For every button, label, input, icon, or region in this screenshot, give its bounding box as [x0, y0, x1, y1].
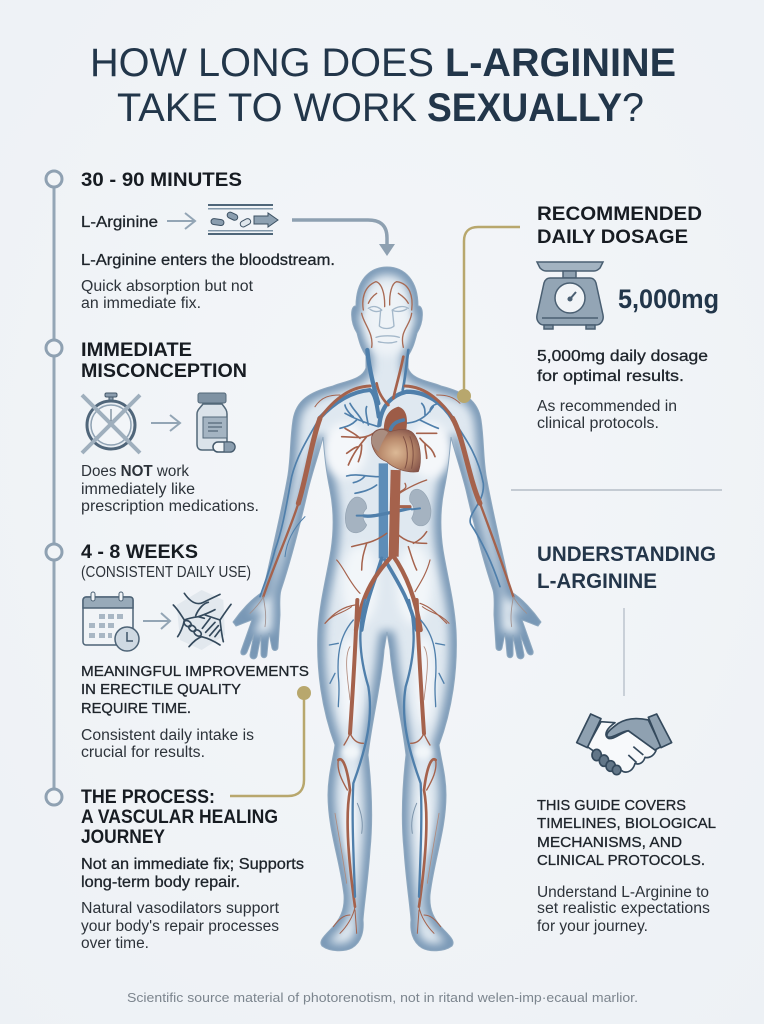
panel: 30 - 90 minutes — [81, 169, 335, 312]
heading: recommended daily dosage — [537, 203, 702, 248]
gold connector: dosage to shoulder — [457, 227, 520, 403]
arteries — [263, 357, 513, 630]
icon: crossed-out stopwatch — [82, 393, 140, 453]
upper body vessels — [250, 282, 527, 630]
text: natural vasodilators: Natural vasodilators support — [81, 900, 280, 917]
arrow: to bloodstream — [167, 213, 195, 229]
arrow: stopwatch to medication — [151, 415, 180, 431]
text: daily dosage: 5,000mg daily dosage — [537, 348, 708, 365]
text: guide covers: CLINICAL PROTOCOLS. — [537, 852, 705, 869]
timeline rail — [46, 171, 62, 805]
heading: the process — [81, 786, 278, 848]
heading: immediate misconception: IMMEDIATE — [81, 339, 192, 361]
arrow: calendar to improvement — [143, 613, 170, 629]
heading: understanding l-arginine: UNDERSTANDING — [537, 543, 716, 566]
heading: the process: JOURNEY — [81, 826, 165, 848]
text: clinical protocols: clinical protocols. — [537, 415, 659, 432]
text: not an immediate fix: Not an immediate fix; Supports — [81, 856, 304, 873]
text: guide covers: TIMELINES, BIOLOGICAL — [537, 815, 716, 832]
text: does not work: immediately like — [81, 481, 195, 498]
icon: calendar with clock — [83, 592, 139, 651]
heart — [371, 429, 420, 472]
panel: understanding l-arginine — [537, 543, 716, 935]
footer note: Scientific source material of photorenotism, not in ritand welen-imp·ecaual marlior. — [127, 990, 638, 1005]
text: realistic expectations: set realistic expectations — [537, 900, 710, 917]
text: consistent intake — [81, 727, 254, 761]
text: consistent intake: Consistent daily intake is — [81, 727, 254, 744]
head vessels — [362, 282, 412, 347]
text: enters bloodstream: L-Arginine enters the bloodstream. — [81, 252, 335, 269]
text: meaningful improvements: MEANINGFUL IMPROVEMENTS — [81, 663, 309, 680]
body silhouette — [233, 267, 541, 951]
text: quick absorption — [81, 278, 254, 312]
panel: recommended daily dosage — [537, 203, 719, 432]
right leg vessels — [404, 600, 449, 933]
text: guide covers: THIS GUIDE COVERS — [537, 797, 686, 814]
icon: bloodstream vessel — [208, 204, 278, 235]
title: ? — [622, 86, 644, 130]
panel: the process — [81, 786, 304, 952]
text: clinical protocols — [537, 398, 677, 432]
icon: handshake — [577, 714, 672, 775]
text: does not work: prescription medications. — [81, 498, 259, 515]
heading: understanding l-arginine — [537, 543, 716, 593]
heading: recommended daily dosage: DAILY DOSAGE — [537, 226, 688, 248]
icon: weighing scale — [537, 262, 603, 329]
text: daily dosage: for optimal results. — [537, 368, 684, 385]
text: does not work: Does NOT work — [81, 463, 189, 480]
left leg vessels — [325, 600, 370, 933]
arrow: bloodstream to body — [292, 220, 395, 256]
text: realistic expectations: Understand L-Arginine to — [537, 884, 709, 901]
heading: understanding l-arginine: L-ARGININE — [537, 570, 657, 593]
panel: immediate misconception — [81, 339, 259, 515]
text: not an immediate fix: long-term body repair. — [81, 874, 240, 891]
label: L-Arginine: L-Arginine — [81, 214, 158, 231]
text: does not work — [81, 463, 259, 515]
text: natural vasodilators: your body's repair processes — [81, 918, 279, 935]
icon: clasped hands — [173, 590, 231, 650]
text: consistent intake: crucial for results. — [81, 744, 205, 761]
title: HOW LONG DOES — [90, 41, 434, 85]
heading: the process: A VASCULAR HEALING — [81, 806, 278, 828]
title: L-ARGININE — [445, 41, 676, 85]
text: daily dosage — [537, 348, 708, 385]
panel: 4 - 8 weeks — [81, 541, 309, 761]
human body with circulatory system — [233, 267, 541, 951]
text: meaningful improvements: REQUIRE TIME. — [81, 700, 191, 717]
text: realistic expectations — [537, 884, 710, 935]
title — [90, 41, 676, 130]
kidneys — [345, 489, 431, 533]
aortic arch — [384, 407, 407, 437]
icon: pill bottle — [197, 393, 235, 452]
title: TAKE TO WORK — [117, 86, 417, 130]
gold connector: process to leg — [230, 686, 311, 796]
text: meaningful improvements — [81, 663, 309, 717]
heart vein overlay — [389, 420, 403, 437]
text: realistic expectations: for your journey. — [537, 918, 648, 935]
text: natural vasodilators — [81, 900, 280, 952]
dosage value: 5,000mg — [618, 284, 719, 314]
text: natural vasodilators: over time. — [81, 935, 149, 952]
face features — [368, 307, 408, 343]
text: guide covers: MECHANISMS, AND — [537, 834, 682, 851]
heading: the process: THE PROCESS: — [81, 786, 215, 808]
title: SEXUALLY — [427, 86, 622, 130]
text: guide covers — [537, 797, 716, 869]
text: not an immediate fix — [81, 856, 304, 891]
heading: immediate misconception — [81, 339, 247, 382]
renal branches — [357, 508, 420, 516]
text: meaningful improvements: IN ERECTILE QUALITY — [81, 681, 241, 698]
hand details — [250, 597, 527, 627]
heading: 30 - 90 minutes: 30 - 90 MINUTES — [81, 169, 242, 191]
text: quick absorption: Quick absorption but not — [81, 278, 254, 295]
heading: 4 - 8 weeks: 4 - 8 WEEKS — [81, 541, 198, 563]
subheading: consistent daily use: (CONSISTENT DAILY USE) — [81, 564, 251, 581]
text: clinical protocols: As recommended in — [537, 398, 677, 415]
heading: immediate misconception: MISCONCEPTION — [81, 360, 247, 382]
heading: recommended daily dosage: RECOMMENDED — [537, 203, 702, 225]
veins — [260, 350, 500, 630]
text: quick absorption: an immediate fix. — [81, 295, 201, 312]
